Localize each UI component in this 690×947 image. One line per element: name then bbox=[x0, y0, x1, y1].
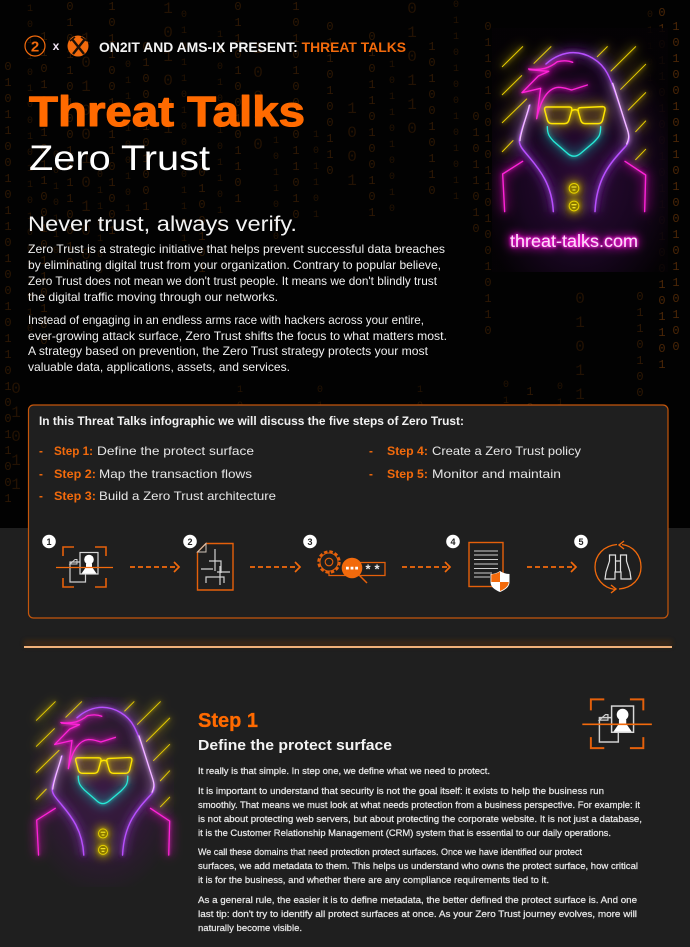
arrow 4 to 5 bbox=[527, 562, 576, 572]
background: binary rain: 0110100110 bbox=[323, 20, 337, 180]
step list: - bbox=[39, 489, 43, 503]
background: binary rain: 01011010010110010 bbox=[63, 0, 77, 272]
background: binary rain: 010110100101101 bbox=[178, 10, 190, 250]
badge 3: 3 bbox=[307, 537, 313, 547]
background: binary rain: 01101001011010 bbox=[644, 10, 656, 234]
intro text: A strategy based on prevention, the Zero Trust strategy protects your most bbox=[28, 345, 429, 358]
step list: Build a Zero Trust architecture bbox=[99, 489, 276, 503]
neon hacker illustration bbox=[30, 697, 174, 887]
background: binary rain: 0110100 bbox=[633, 290, 647, 402]
step list: Create a Zero Trust policy bbox=[432, 444, 581, 458]
background: binary rain: 0101100101101001011010011001 bbox=[1, 60, 15, 508]
badge 2: 2 bbox=[187, 537, 193, 547]
background: binary rain: 101 bbox=[234, 385, 246, 433]
background: binary rain: 101 bbox=[523, 385, 537, 433]
icon: architecture gear and password: * bbox=[374, 562, 380, 576]
background: binary rain: 1010010110 bbox=[425, 40, 439, 200]
background: binary rain: 11010010110010110100 bbox=[37, 30, 51, 350]
step list: Step 3: bbox=[54, 489, 96, 503]
badge 5 bbox=[574, 535, 588, 548]
background: binary rain: 010110 bbox=[403, 0, 421, 144]
step body text: it is the Customer Relationship Management (CRM) system that is essential to our daily operations. bbox=[198, 828, 611, 838]
step list: Step 2: bbox=[54, 467, 96, 481]
step list: Define the protect surface bbox=[97, 444, 254, 458]
background: binary rain: 01011 bbox=[571, 290, 589, 410]
step list: Monitor and maintain bbox=[432, 467, 561, 481]
badge 2 bbox=[183, 535, 197, 548]
icon: architecture gear and password bbox=[318, 552, 385, 583]
step body text: As a general rule, the easier it is to define metadata, the better defined the protect surface is. And one bbox=[198, 895, 637, 905]
background: binary rain: 10100101 bbox=[195, 150, 209, 278]
background: binary rain: 010110100101 bbox=[365, 30, 379, 222]
background: binary rain: 0101 bbox=[500, 380, 512, 444]
background: binary rain: 101001 bbox=[159, 0, 177, 144]
background: binary rain: 10101001011010 bbox=[289, 0, 303, 224]
badge 3 bbox=[303, 535, 317, 548]
background: binary rain bbox=[1, 0, 683, 508]
background: binary rain: 0010110 bbox=[50, 150, 62, 262]
background: binary rain: 1101001011010 bbox=[214, 30, 226, 238]
intro text: Zero Trust is a strategic initiative that helps prevent successful data breaches bbox=[28, 243, 445, 256]
step list: - bbox=[39, 444, 43, 458]
icon: ON2IT logo bbox=[25, 36, 45, 56]
step body text: It is important to understand that security is not the goal itself: it exists to help the business run bbox=[198, 786, 604, 796]
background: binary rain: 01001101001 bbox=[139, 40, 153, 216]
step body text: is not about protecting web servers, but about protecting the corporate website. It is not just a database, bbox=[198, 814, 642, 824]
background: binary rain: 01011010 bbox=[270, 120, 282, 248]
background: binary rain: 101 bbox=[414, 385, 426, 433]
background: binary rain: 01101001011010010110 bbox=[481, 20, 495, 340]
background: binary rain: 0110100 bbox=[94, 170, 106, 282]
arrow 2 to 3 bbox=[250, 562, 300, 572]
background: binary rain: 1001 bbox=[343, 100, 361, 196]
icon: protect surface large bbox=[582, 699, 652, 748]
step number: Step 1 bbox=[198, 709, 258, 732]
icon: AMS-IX logo bbox=[68, 36, 88, 56]
background: binary rain: 01011010010110100101101 bbox=[655, 6, 669, 374]
icon: policy document with shield bbox=[469, 542, 510, 592]
step list bbox=[39, 444, 581, 503]
background: binary rain: 01011 bbox=[7, 380, 25, 500]
website link: threat-talks.com bbox=[510, 231, 638, 251]
step body text: smoothly. That means we must look at what needs protection from a business perspective. For example: it bbox=[198, 800, 640, 810]
badge 1 bbox=[42, 535, 56, 548]
badge 4 bbox=[446, 535, 460, 548]
icon: architecture gear and password: * bbox=[365, 562, 371, 576]
arrow 3 to 4 bbox=[402, 562, 450, 572]
step body text: last tip: don't try to identify all protect surfaces at once. As your Zero Trust journey evolves, more will bbox=[198, 909, 637, 919]
icon: protect surface bbox=[56, 547, 113, 587]
arrow 1 to 2 bbox=[130, 562, 179, 572]
background: binary rain: 0110100101101 bbox=[231, 0, 245, 208]
background: binary rain: 0110100101011 bbox=[450, 0, 462, 208]
panel: five steps overview bbox=[28, 405, 668, 618]
intro text: valuable data, applications, assets, and services. bbox=[28, 361, 290, 374]
title: Threat Talks bbox=[29, 88, 305, 136]
tagline: Never trust, always verify. bbox=[28, 212, 297, 236]
background: binary rain: 011 bbox=[314, 385, 326, 433]
multiplication sign: x bbox=[53, 39, 60, 53]
intro text bbox=[28, 243, 447, 374]
background: binary rain: 101101 bbox=[310, 130, 322, 226]
step list: Step 1: bbox=[54, 444, 93, 458]
step title: Define the protect surface bbox=[198, 738, 392, 754]
step list: - bbox=[39, 467, 43, 481]
icon: transaction flow document bbox=[198, 544, 233, 590]
intro text: Zero Trust does not mean we don't trust people. It means we don't blindly trust bbox=[28, 275, 438, 288]
background: binary rain: 101100101101001 bbox=[105, 0, 119, 240]
step body text: surfaces, we add metadata to them. This helps us understand who owns the protect surface, how critical bbox=[198, 861, 638, 871]
background: binary rain: 010 bbox=[554, 382, 566, 430]
intro text: ever-growing attack surface, Zero Trust shifts the focus to what matters most. bbox=[28, 330, 447, 343]
intro text: by eliminating digital trust from your organization. Contrary to popular believe, bbox=[28, 259, 441, 272]
step list: - bbox=[369, 467, 373, 481]
subtitle: Zero Trust bbox=[29, 139, 210, 178]
background: binary rain: 0110100101 bbox=[122, 60, 134, 220]
panel heading: In this Threat Talks infographic we will discuss the five steps of Zero Trust: bbox=[39, 414, 464, 428]
badge 5: 5 bbox=[578, 537, 584, 547]
icon: monitoring binoculars bbox=[595, 541, 641, 593]
step list: Map the transaction flows bbox=[99, 467, 252, 481]
step body text: it is for the business, and whether there are any compliance requirements tied to it. bbox=[198, 875, 549, 885]
step list: - bbox=[369, 444, 373, 458]
section: step 1 bbox=[30, 697, 652, 933]
step list: Step 4: bbox=[387, 444, 428, 458]
divider bbox=[24, 640, 672, 648]
header logos and presenter line bbox=[25, 36, 406, 56]
background: binary rain: 101001011010010110100 bbox=[669, 20, 683, 356]
neon hacker with website bbox=[492, 28, 668, 272]
step body text: We call these domains that need protection protect surfaces. Once we have identified our protect bbox=[198, 847, 582, 857]
background: binary rain: 1011010010 bbox=[386, 60, 398, 220]
background: binary rain: 101101001011010011010 bbox=[24, 4, 36, 340]
step list: Step 5: bbox=[387, 467, 428, 481]
icon: neon hacker bbox=[502, 47, 646, 212]
background: binary rain: 10010 bbox=[249, 40, 267, 160]
step body text: It really is that simple. In step one, we define what we need to protect. bbox=[198, 766, 490, 776]
intro text: the digital traffic moving through our networks. bbox=[28, 291, 278, 304]
badge 1: 1 bbox=[46, 537, 52, 547]
intro text: Instead of engaging in an endless arms race with hackers across your entire, bbox=[28, 314, 424, 327]
step body text: naturally become visible. bbox=[198, 923, 302, 933]
badge 4: 4 bbox=[450, 537, 456, 547]
background: binary rain: 1010010100 bbox=[77, 30, 95, 270]
background: binary rain: 01011010 bbox=[469, 110, 483, 238]
icon: ON2IT logo: 2 bbox=[31, 38, 39, 56]
presenter line: ON2IT AND AMS-IX PRESENT: THREAT TALKS bbox=[99, 39, 406, 55]
step body text bbox=[198, 766, 642, 933]
hero black background bbox=[0, 0, 690, 528]
